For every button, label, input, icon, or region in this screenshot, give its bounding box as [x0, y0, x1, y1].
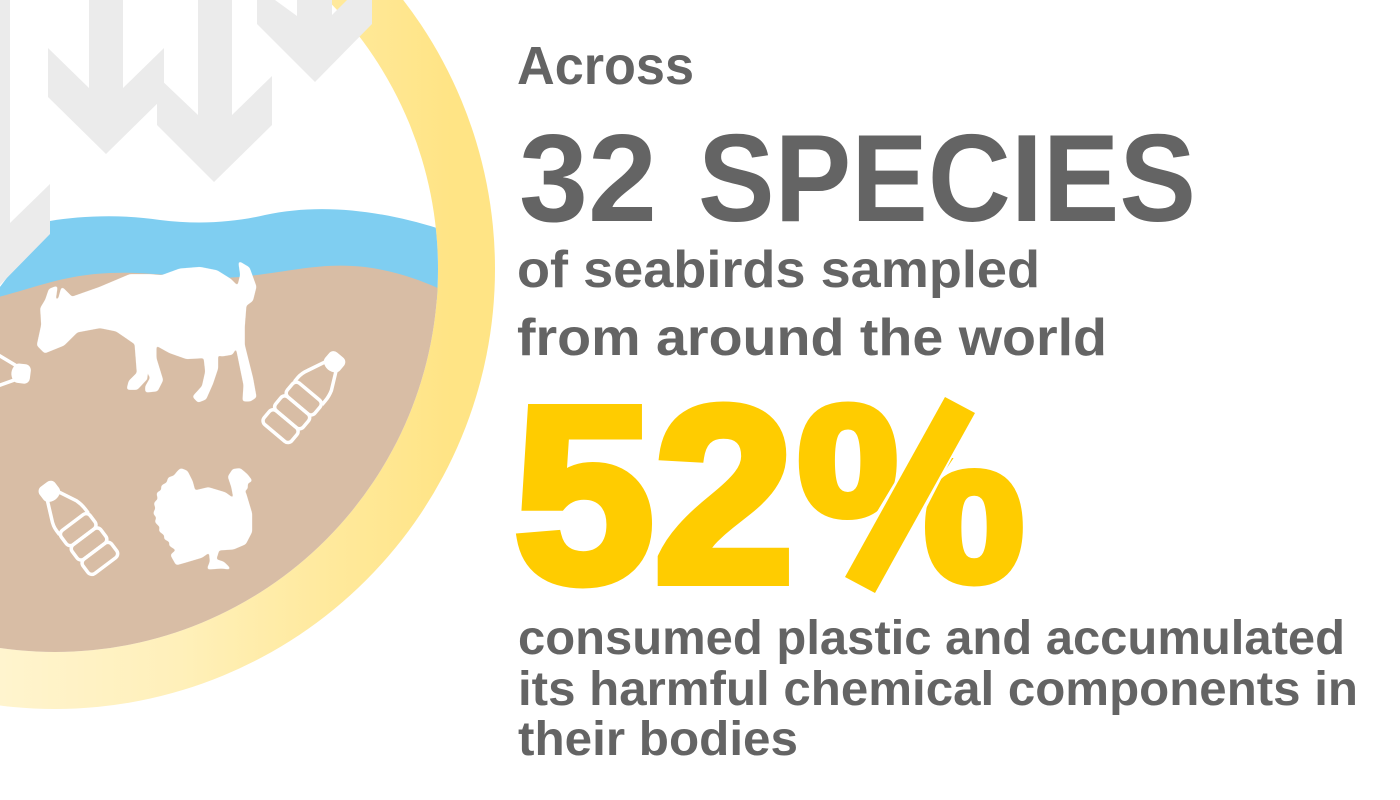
icon: bottle right [261, 345, 353, 445]
icon: goat [38, 263, 255, 401]
icon: turkey [154, 469, 251, 568]
illustration: circular scene [0, 0, 495, 709]
description line two: its harmful chemical components in [518, 663, 1358, 716]
description line three: their bodies [518, 713, 798, 766]
water band [0, 209, 440, 300]
arrow far left [0, 0, 50, 285]
water and sand [0, 209, 440, 660]
heading: Across: Across [517, 36, 694, 96]
arrow one [48, 0, 164, 154]
text: from around the world: from around the world [517, 309, 1107, 367]
icon: bottle cut off at left [0, 344, 31, 392]
heading: 32 species [519, 110, 1196, 248]
inner white disc [0, 0, 438, 652]
word species: SPECIES [698, 110, 1196, 248]
icon: bottle lower [31, 475, 120, 576]
arrow three [257, 0, 372, 82]
stat digits: 52 [514, 355, 794, 634]
percent slash [845, 397, 975, 593]
text: of seabirds sampled: of seabirds sampled [517, 241, 1040, 299]
description line one: consumed plastic and accumulated [518, 612, 1345, 665]
percent rings: % [797, 354, 1025, 633]
number 32: 32 [519, 110, 657, 248]
sand [0, 266, 440, 660]
arrows falling [0, 0, 372, 285]
arrow two [157, 0, 272, 182]
big stat: 52 percent [516, 397, 1023, 593]
yellow ring [0, 0, 495, 709]
